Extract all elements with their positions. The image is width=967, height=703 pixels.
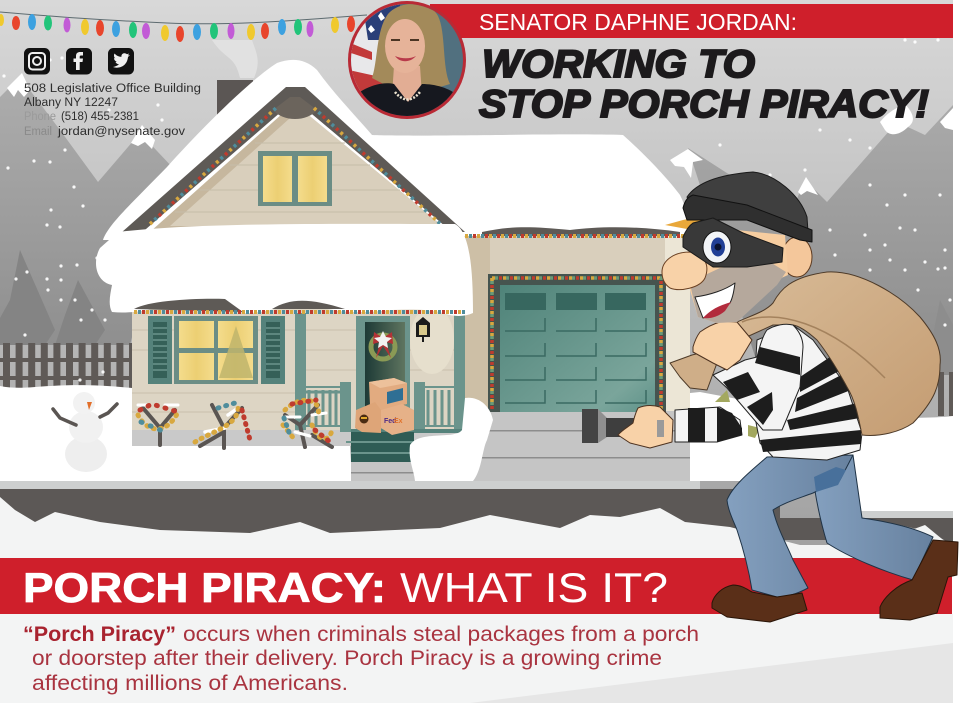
wreath — [371, 331, 395, 359]
eaves snow overhang — [96, 224, 473, 316]
walkway — [351, 462, 415, 481]
hair — [372, 4, 450, 90]
snowman — [53, 392, 117, 472]
portrait of the senator — [348, 1, 466, 119]
contact details: 508 Legislative Office Building — [24, 83, 201, 95]
mountain snow caps — [7, 73, 953, 195]
road — [0, 489, 953, 545]
description text: affecting millions of Americans. — [32, 672, 348, 695]
snow mound beside walkway — [410, 398, 493, 481]
hair — [665, 218, 713, 229]
window shutters — [148, 316, 285, 384]
description text: or doorstep after their delivery. Porch Piracy is a growing crime — [32, 647, 662, 670]
chimney — [217, 80, 253, 130]
headline: STOP PORCH PIRACY! — [479, 83, 929, 126]
ground snow — [0, 385, 953, 559]
beard — [690, 262, 786, 323]
icon: instagram — [24, 48, 50, 74]
shrub right — [283, 400, 332, 447]
string of holiday lights — [0, 12, 367, 42]
nose — [662, 252, 707, 290]
door — [356, 316, 410, 432]
glow by lamp — [410, 306, 454, 374]
flashlight — [582, 409, 658, 443]
headline: WORKING TO — [482, 43, 755, 86]
eye — [703, 231, 731, 263]
contact details: Phone — [24, 111, 56, 123]
fence right — [938, 372, 953, 416]
back shoe — [880, 540, 958, 620]
raised hand — [693, 322, 752, 370]
bottom banner — [0, 558, 952, 614]
porch railings — [306, 382, 454, 432]
porch columns — [295, 313, 465, 430]
description text — [23, 623, 699, 695]
social media icons — [24, 48, 134, 74]
roof snow — [103, 60, 688, 240]
driveway — [465, 411, 690, 481]
top banner: SENATOR DAPHNE JORDAN: — [479, 9, 797, 35]
contact details — [24, 83, 201, 138]
white right margin — [953, 0, 967, 703]
icon: twitter — [108, 48, 134, 74]
face — [688, 225, 788, 323]
attic window — [258, 151, 332, 206]
foreground snow — [0, 497, 953, 559]
lowered sleeve — [675, 407, 742, 442]
thief character — [582, 172, 958, 622]
sack neck — [670, 353, 717, 390]
steps — [346, 432, 419, 463]
head — [662, 172, 812, 323]
front shoe — [712, 585, 807, 622]
shrub left — [138, 404, 178, 445]
headline — [479, 43, 929, 126]
front leg — [727, 455, 853, 597]
pavement — [0, 481, 700, 489]
contact details: jordan@nysenate.gov — [57, 126, 185, 138]
hat band — [683, 195, 812, 242]
packages: Fed — [384, 418, 396, 425]
back pocket — [814, 467, 846, 492]
ear — [782, 237, 812, 277]
eaves dark roof — [134, 299, 345, 312]
packages — [355, 378, 414, 435]
pine trees — [0, 250, 105, 345]
chimney smoke — [212, 40, 258, 78]
hand on flashlight — [618, 406, 673, 448]
raised arm sleeve — [713, 324, 803, 430]
bush behind thief — [715, 390, 760, 438]
contact details: (518) 455-2381 — [61, 111, 139, 123]
house — [96, 40, 690, 481]
roof fan vent — [273, 97, 317, 119]
back leg — [812, 455, 933, 580]
jacket — [360, 83, 453, 116]
winter background scene — [0, 0, 953, 560]
face — [385, 19, 425, 73]
fence left — [0, 358, 132, 380]
packages: Ex — [394, 418, 403, 425]
contact details: Email — [24, 126, 52, 138]
porch lamp — [416, 317, 430, 342]
garage wing wall — [465, 236, 690, 416]
garage door — [488, 274, 666, 412]
falling snow — [4, 36, 950, 380]
top banner — [430, 4, 953, 38]
striped torso — [753, 325, 862, 460]
sack — [670, 272, 940, 435]
bottom banner: PORCH PIRACY: — [23, 564, 386, 611]
bottom banner: WHAT IS IT? — [400, 564, 668, 611]
shrubs with lights — [138, 400, 332, 448]
description text: “Porch Piracy” — [23, 623, 176, 646]
shrub middle — [195, 403, 250, 448]
front window — [174, 316, 258, 384]
hat — [687, 172, 808, 232]
lower panel background — [0, 614, 953, 703]
gable roof — [122, 87, 465, 244]
neck — [392, 66, 422, 102]
flag — [351, 4, 400, 94]
diagonal corner shade — [470, 643, 953, 703]
porch floor — [351, 429, 468, 433]
mouth — [695, 283, 735, 318]
contact details: Albany NY 12247 — [24, 97, 118, 109]
main wall — [132, 308, 465, 430]
icon: facebook — [66, 48, 92, 74]
gable wall — [150, 112, 450, 232]
gable lights — [150, 108, 448, 231]
eaves lights — [134, 236, 690, 312]
description text: occurs when criminals steal packages from a porch — [183, 623, 699, 646]
dark mountains — [0, 77, 953, 372]
mask — [683, 218, 783, 267]
